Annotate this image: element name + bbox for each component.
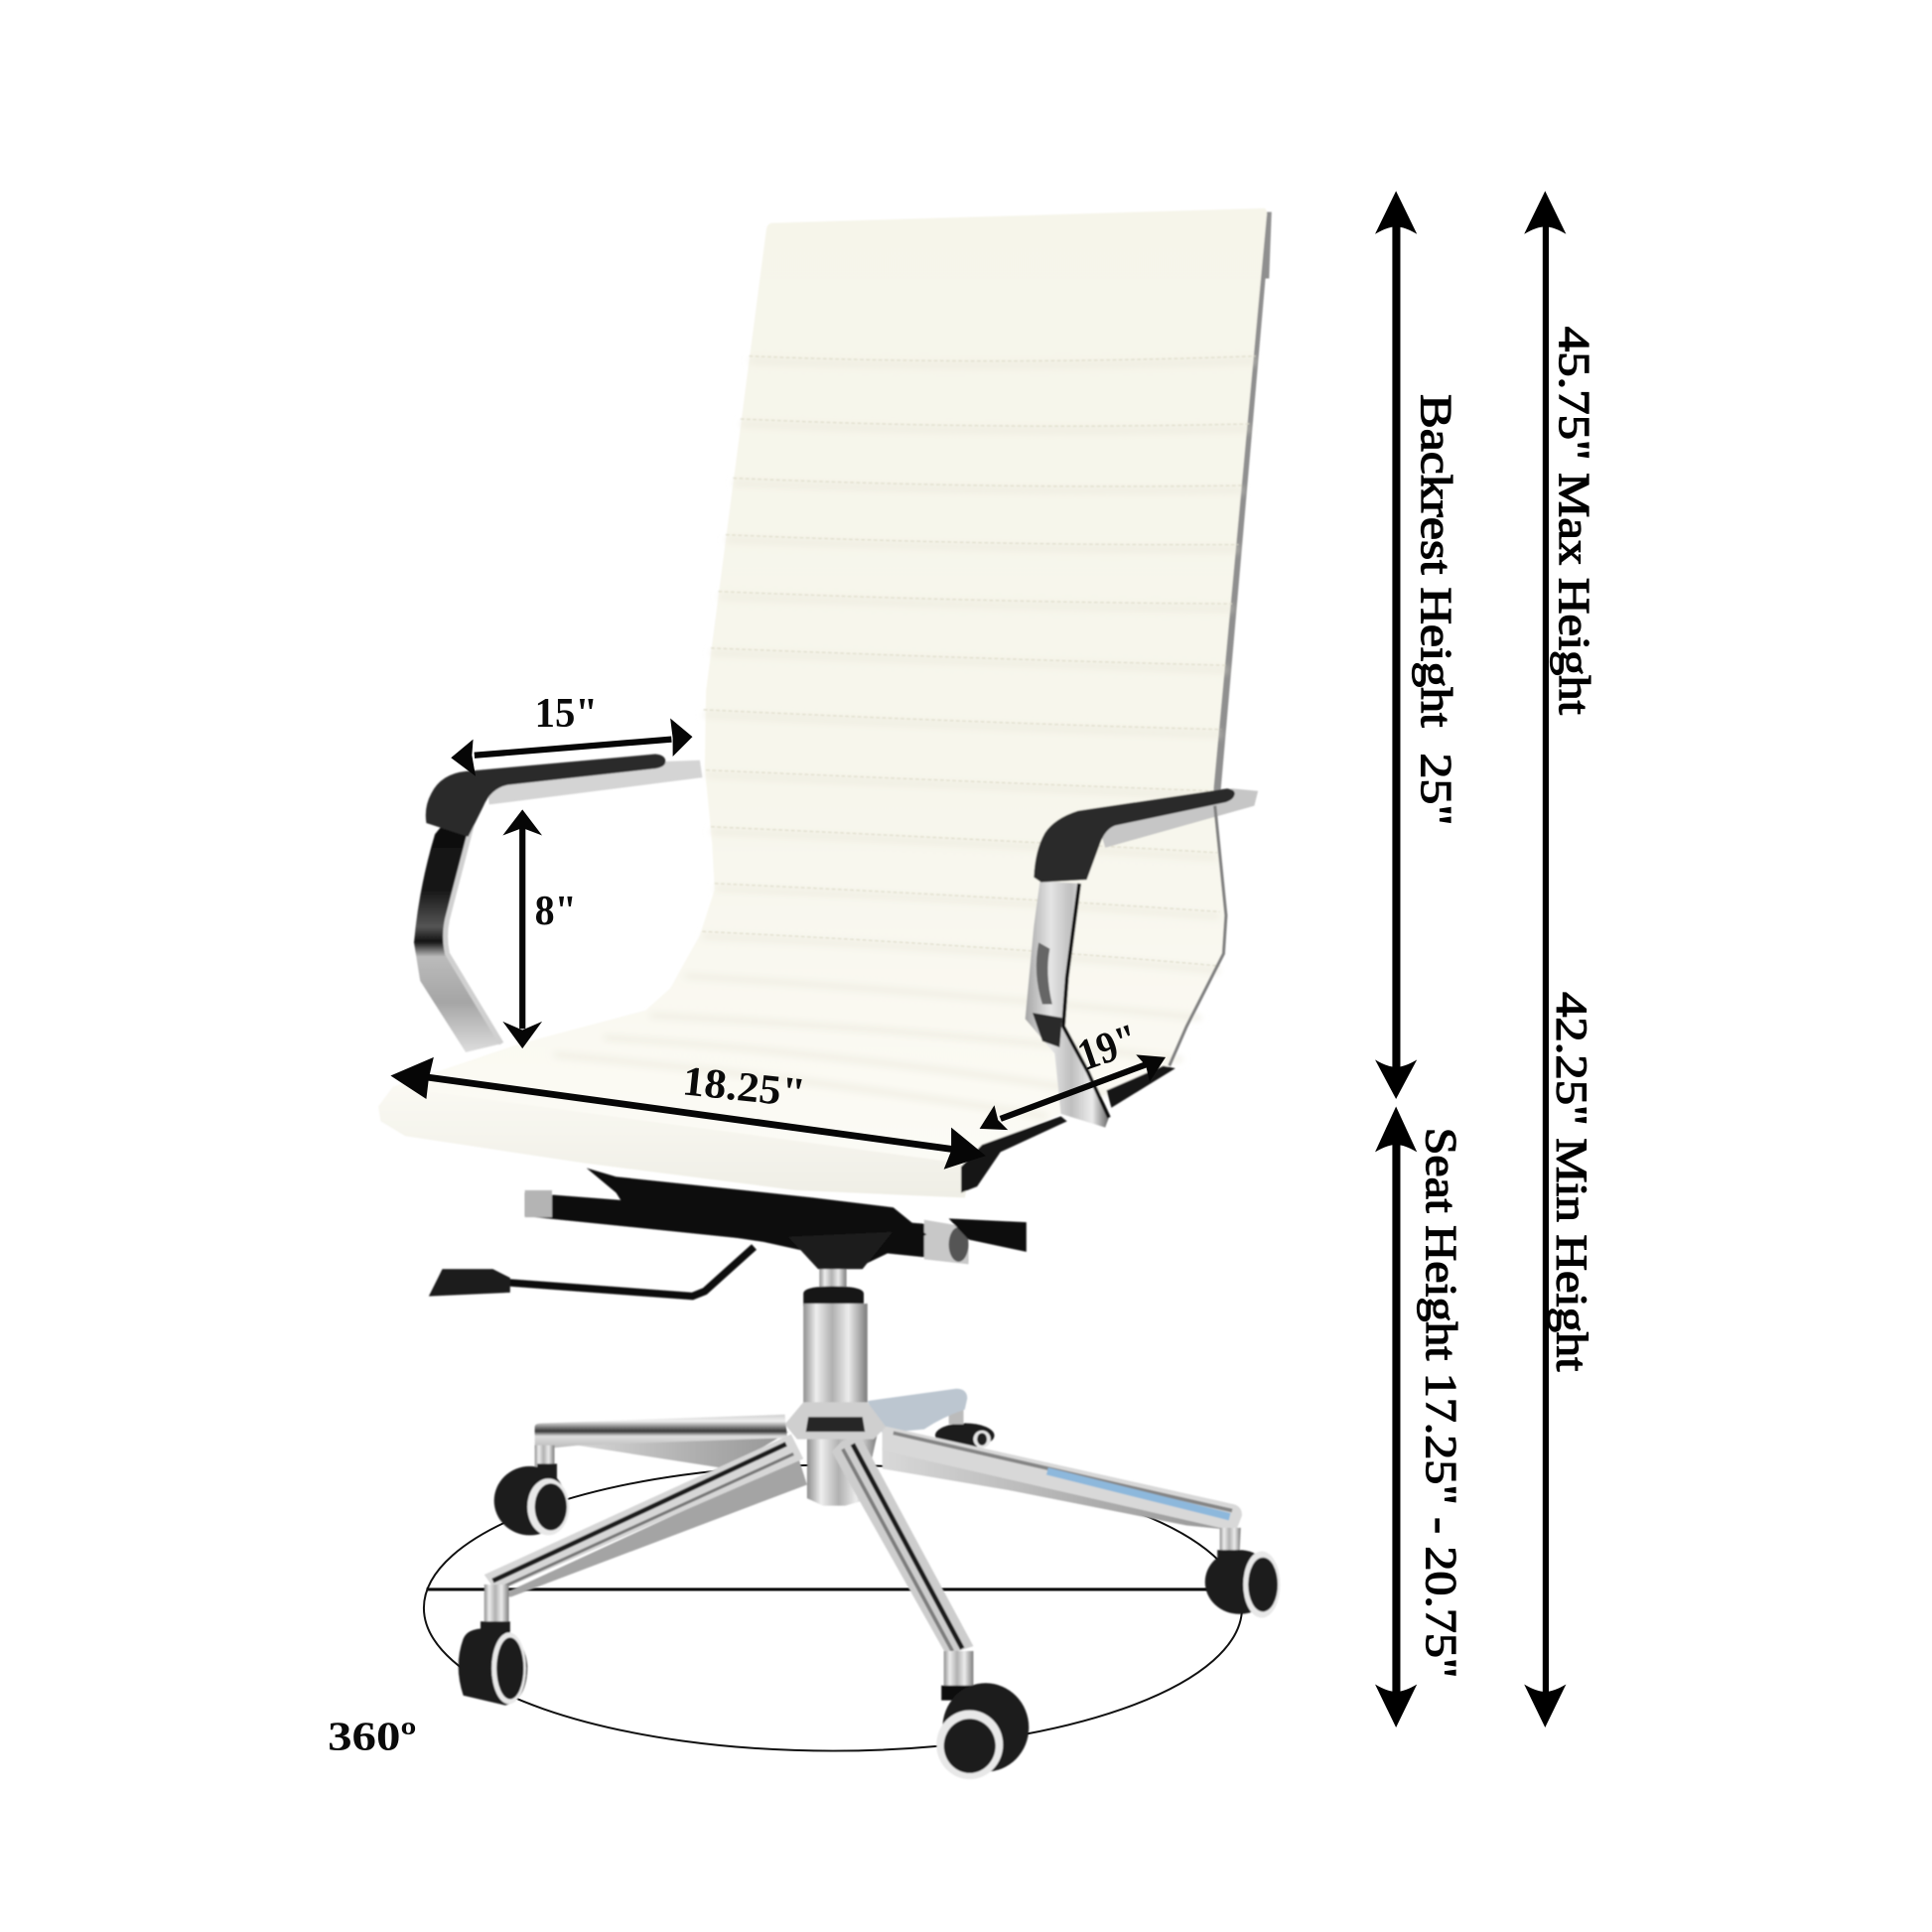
- arm height arrow: [502, 809, 542, 1048]
- seat height arrow: [1375, 1106, 1417, 1727]
- right caster: [1205, 1550, 1280, 1618]
- seat depth arrow: [980, 1054, 1166, 1130]
- label: backrest height: Backrest Height 25": [1412, 394, 1461, 826]
- seat front lip: [378, 1087, 967, 1197]
- right side chrome strip: [1212, 211, 1272, 801]
- right armrest: [1026, 788, 1258, 1128]
- label: seat height: Seat Height 17.25" - 20.75": [1417, 1128, 1466, 1678]
- upholstery ribs: [554, 361, 1256, 1116]
- chair photo drawing: [378, 208, 1280, 1779]
- back left caster: [494, 1463, 569, 1535]
- label: seat depth: 19": [1071, 1014, 1145, 1080]
- front caster: [936, 1683, 1029, 1779]
- seat tilt mechanism: [525, 1169, 1027, 1269]
- hub lower cylinder: [807, 1435, 878, 1506]
- label: seat width: 18.25": [680, 1057, 808, 1117]
- height adjustment lever: [429, 1247, 755, 1297]
- backrest and seat upholstery: [378, 208, 1272, 1197]
- label: swivel: 360º: [328, 1714, 416, 1758]
- label: max height: 45.75" Max Height: [1550, 327, 1599, 715]
- arm length arrow: [451, 719, 692, 776]
- right base leg: [883, 1426, 1242, 1555]
- label: min height: 42.25" Min Height: [1548, 992, 1597, 1372]
- overall height arrow: [1524, 191, 1566, 1727]
- label: arm height: 8": [535, 888, 577, 934]
- 360 degree swivel circle: [424, 1465, 1242, 1751]
- back right base leg: [868, 1389, 967, 1433]
- front base leg: [832, 1436, 973, 1691]
- back left base leg: [535, 1415, 788, 1468]
- label: arm length: 15": [535, 690, 598, 737]
- back right caster: [935, 1405, 995, 1448]
- backrest height arrow: [1375, 191, 1417, 1099]
- left armrest: [414, 755, 702, 1052]
- seat frame black side: [961, 1066, 1175, 1192]
- seat width arrow: [390, 1057, 986, 1170]
- gas lift cylinder: [785, 1264, 886, 1440]
- left front caster: [459, 1621, 527, 1706]
- left base leg: [484, 1435, 807, 1626]
- upholstery stitching: [702, 356, 1256, 966]
